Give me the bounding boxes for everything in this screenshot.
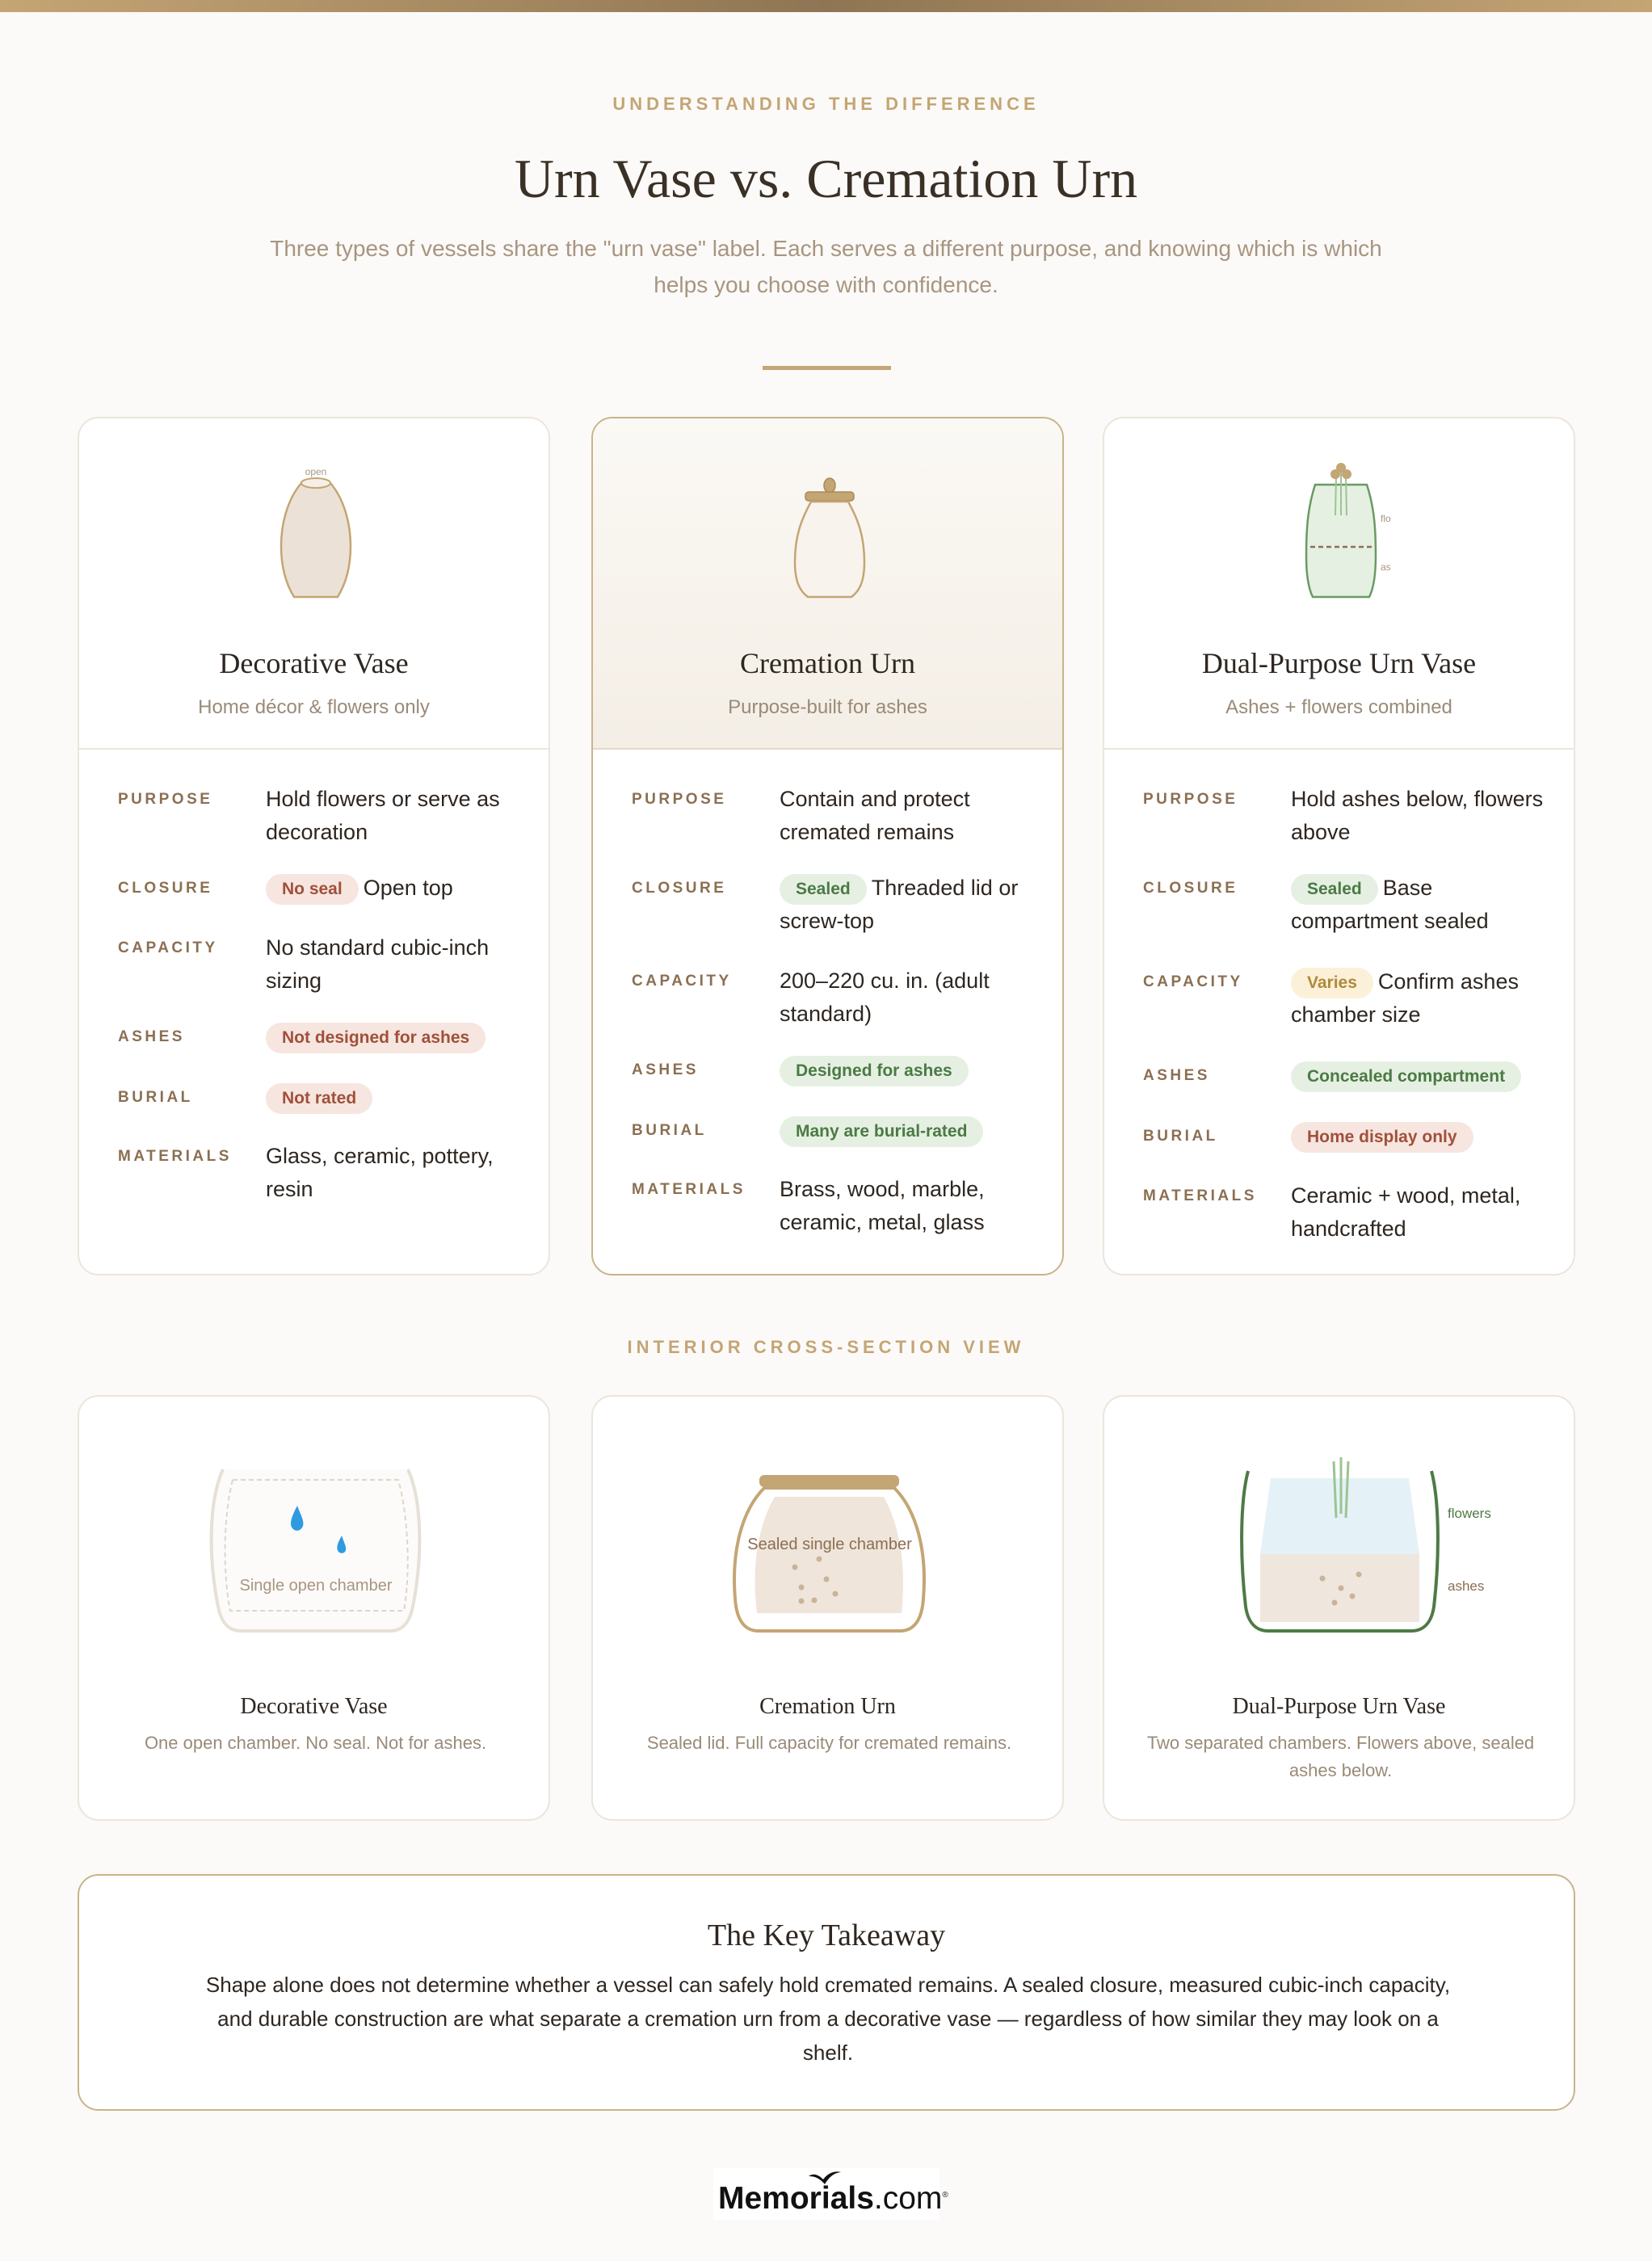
panel: cremation urn [591, 417, 1064, 1275]
icon: dual-purpose urn vase [1305, 463, 1391, 598]
panel: dual-purpose urn vase: MATERIALS [1143, 1187, 1257, 1204]
illustration: two chambers: flowers [1448, 1506, 1491, 1521]
panel: decorative vase: Not designed for ashes [282, 1028, 469, 1047]
icon: dual-purpose urn vase: flo [1381, 513, 1391, 524]
panel: dual-purpose urn vase: Varies [1307, 973, 1357, 992]
panel: cross-section decorative vase: Decorative Vase [240, 1694, 388, 1719]
panel: dual-purpose urn vase: CLOSURE [1143, 880, 1238, 897]
panel: cremation urn: Many are burial-rated [796, 1122, 967, 1141]
panel: cremation urn: BURIAL [632, 1122, 707, 1139]
icon: decorative vase [280, 466, 352, 598]
panel: decorative vase: BURIAL [118, 1089, 193, 1106]
panel: cross-section dual-purpose [1103, 1395, 1575, 1821]
card header: decorative vase: Decorative Vase [219, 647, 409, 679]
panel: dual-purpose urn vase [1103, 417, 1575, 1275]
illustration: sealed chamber: Sealed single chamber [747, 1536, 912, 1553]
panel: dual-purpose urn vase: Hold ashes below, flowers above [1291, 787, 1543, 844]
panel: decorative vase: CAPACITY [118, 939, 218, 956]
panel: decorative vase: MATERIALS [118, 1148, 232, 1165]
divider [763, 366, 891, 370]
illustration: sealed chamber [733, 1475, 926, 1633]
card header: decorative vase [79, 418, 549, 750]
panel: decorative vase: Glass, ceramic, pottery, resin [266, 1144, 494, 1201]
callout: key takeaway [78, 1874, 1575, 2111]
icon: decorative vase: open [305, 466, 326, 477]
panel: cremation urn: ASHES [632, 1061, 699, 1078]
card header: cremation urn: Cremation Urn [740, 647, 915, 679]
panel: cremation urn: 200–220 cu. in. (adult standard) [780, 969, 990, 1026]
spec rows [1143, 787, 1543, 1241]
panel: decorative vase: Open top [364, 876, 453, 900]
card header: dual-purpose [1104, 418, 1574, 750]
icon: bird [809, 2171, 841, 2184]
subtitle: Three types of vessels share the "urn vase" label. Each serves a different purpose, and knowing which is which helps you choose with confidence. [270, 236, 1382, 297]
icon: dual-purpose urn vase: as [1381, 561, 1391, 573]
illustration: two chambers [1240, 1457, 1491, 1633]
takeaway text: Shape alone does not determine whether a vessel can safely hold cremated remains. A sealed closure, measured cubic-inch capacity, and durable construction are what separate a cremation urn from a decorative vase — regardless of how similar they may look on a shelf. [206, 1973, 1450, 2065]
panel: cross-section dual-purpose: Two separated chambers. Flowers above, sealed ashes below. [1147, 1733, 1534, 1780]
title: Urn Vase vs. Cremation Urn [515, 148, 1137, 209]
panel: dual-purpose urn vase: CAPACITY [1143, 973, 1243, 990]
panel: dual-purpose urn vase: Base compartment sealed [1291, 876, 1489, 933]
panel: cremation urn: MATERIALS [632, 1181, 746, 1198]
spec rows [632, 787, 1018, 1234]
panel: cross-section decorative vase [78, 1395, 550, 1821]
logo: Memorials.com® [718, 2181, 948, 2216]
panel: dual-purpose urn vase: Concealed compartment [1307, 1067, 1505, 1086]
panel: decorative vase: ASHES [118, 1028, 185, 1045]
panel: dual-purpose urn vase: Ceramic + wood, metal, handcrafted [1291, 1183, 1520, 1241]
panel: cross-section cremation urn: Sealed lid. Full capacity for cremated remains. [647, 1733, 1011, 1753]
panel: cremation urn: Designed for ashes [796, 1061, 952, 1080]
panel: decorative vase: Not rated [282, 1089, 356, 1107]
panel: dual-purpose urn vase: ASHES [1143, 1067, 1210, 1084]
panel: decorative vase: CLOSURE [118, 880, 212, 897]
illustration: two chambers: ashes [1448, 1578, 1484, 1594]
icon: cremation urn [793, 477, 866, 598]
panel: cremation urn: CLOSURE [632, 880, 726, 897]
panel: cremation urn: PURPOSE [632, 791, 726, 808]
panel: cross-section decorative vase: One open chamber. No seal. Not for ashes. [145, 1733, 486, 1753]
spec rows [118, 787, 500, 1201]
card header: decorative vase: Home décor & flowers only [198, 696, 430, 718]
panel: cremation urn: Sealed [796, 880, 851, 898]
eyebrow: UNDERSTANDING THE DIFFERENCE [612, 94, 1040, 114]
panel: cremation urn: Contain and protect cremated remains [780, 787, 970, 844]
card header: dual-purpose: Ashes + flowers combined [1225, 696, 1452, 718]
panel: decorative vase: Hold flowers or serve as decoration [266, 787, 500, 844]
panel: decorative vase: No seal [282, 880, 343, 898]
illustration: open chamber: Single open chamber [239, 1577, 393, 1595]
panel: dual-purpose urn vase: Sealed [1307, 880, 1362, 898]
illustration: open chamber [210, 1469, 422, 1633]
panel: cremation urn: Brass, wood, marble, ceramic, metal, glass [780, 1177, 985, 1234]
card header: cremation urn [593, 418, 1062, 750]
panel: decorative vase: No standard cubic-inch sizing [266, 935, 489, 993]
panel: dual-purpose urn vase: BURIAL [1143, 1128, 1218, 1145]
panel: dual-purpose urn vase: Confirm ashes chamber size [1291, 969, 1519, 1027]
logo [713, 2168, 939, 2220]
panel: decorative vase: PURPOSE [118, 791, 212, 808]
panel: cross-section cremation urn [591, 1395, 1064, 1821]
panel: dual-purpose urn vase: Home display only [1307, 1128, 1457, 1146]
panel: cremation urn: CAPACITY [632, 973, 732, 990]
panel: dual-purpose urn vase: PURPOSE [1143, 791, 1238, 808]
top gradient bar [0, 0, 1652, 12]
panel: cremation urn: Threaded lid or screw-top [780, 876, 1018, 933]
panel: decorative vase [78, 417, 550, 1275]
panel: cross-section dual-purpose: Dual-Purpose Urn Vase [1233, 1694, 1445, 1719]
section heading: cross-section: INTERIOR CROSS-SECTION VIEW [628, 1337, 1024, 1357]
card header: dual-purpose: Dual-Purpose Urn Vase [1202, 647, 1476, 679]
card header: cremation urn: Purpose-built for ashes [728, 696, 927, 718]
takeaway heading: The Key Takeaway [708, 1918, 945, 1952]
panel: cross-section cremation urn: Cremation Urn [759, 1694, 896, 1719]
